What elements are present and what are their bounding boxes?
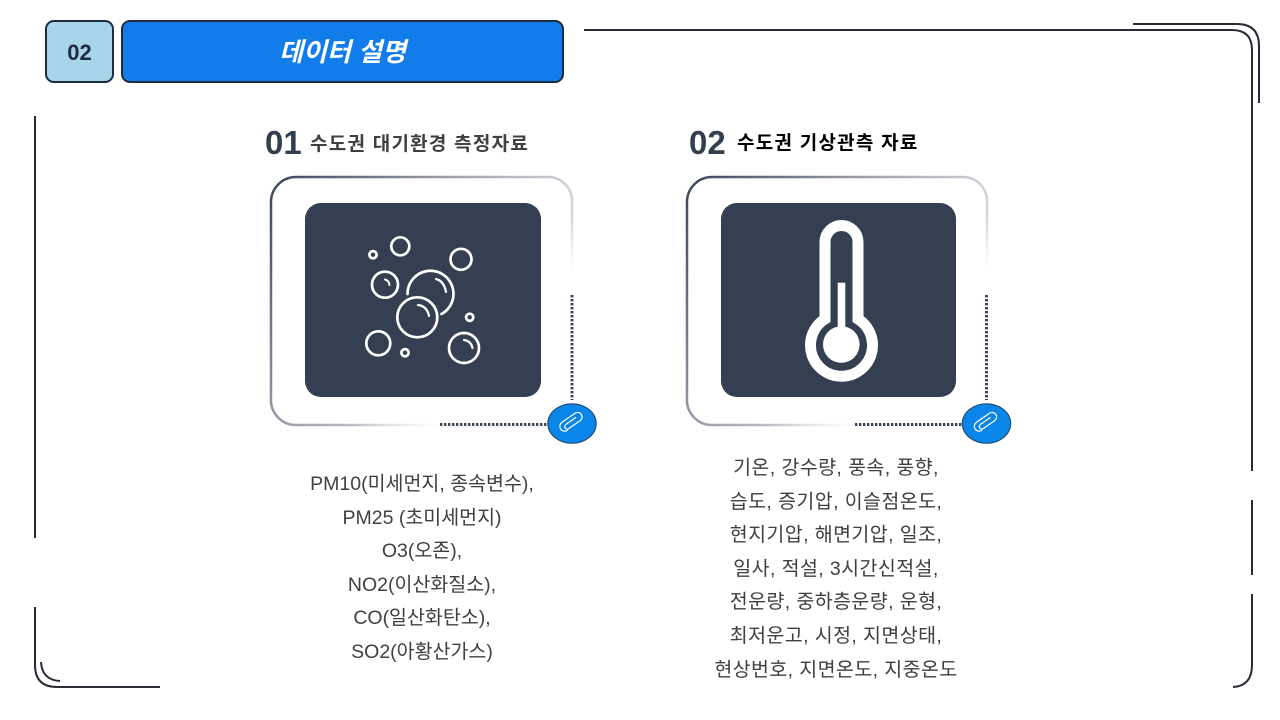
dotted connectors (855, 295, 986, 424)
text block: weather variables: 일사, 적설, 3시간신적설, (733, 558, 939, 580)
icon: thermometer (810, 226, 872, 376)
text block: weather variables (714, 457, 958, 681)
text block: air quality variables: PM10(미세먼지, 종속변수), (310, 473, 534, 495)
icon: bubbles (366, 237, 479, 363)
heading: weather data (689, 124, 919, 161)
icon panel (305, 203, 541, 397)
text block: air quality variables: SO2(아황산가스) (351, 641, 493, 663)
text block: air quality variables: NO2(이산화질소), (348, 574, 496, 596)
card outline (687, 177, 987, 425)
text block: weather variables: 현상번호, 지면온도, 지중온도 (714, 659, 958, 681)
card outline (271, 177, 572, 425)
text block: air quality variables: PM25 (초미세먼지) (342, 507, 502, 529)
text block: weather variables: 전운량, 중하층운량, 운형, (730, 591, 942, 613)
title bar (121, 20, 564, 83)
heading number 01: 01 (265, 124, 302, 161)
text block: air quality variables: O3(오존), (382, 540, 462, 562)
heading text: 수도권 기상관측 자료 (737, 133, 919, 154)
text block: weather variables: 최저운고, 시정, 지면상태, (730, 625, 942, 647)
text block: air quality variables: CO(일산화탄소), (353, 607, 491, 629)
text block: weather variables: 현지기압, 해면기압, 일조, (730, 524, 942, 546)
card: weather (687, 177, 1011, 443)
heading text: 수도권 대기환경 측정자료 (310, 134, 529, 155)
title bar: 데이터 설명 (279, 37, 406, 67)
section number badge (45, 20, 114, 83)
text block: air quality variables (310, 473, 534, 663)
heading number 02: 02 (689, 124, 726, 161)
icon: paperclip badge (962, 404, 1011, 443)
text block: weather variables: 기온, 강수량, 풍속, 풍향, (733, 457, 939, 479)
dotted connectors (440, 295, 572, 424)
section number badge: 02 (67, 40, 92, 65)
text block: weather variables: 습도, 증기압, 이슬점온도, (730, 491, 942, 513)
card: air quality (271, 177, 596, 443)
heading: air quality data (265, 124, 529, 161)
icon: paperclip badge (548, 404, 596, 443)
icon panel (721, 203, 956, 397)
